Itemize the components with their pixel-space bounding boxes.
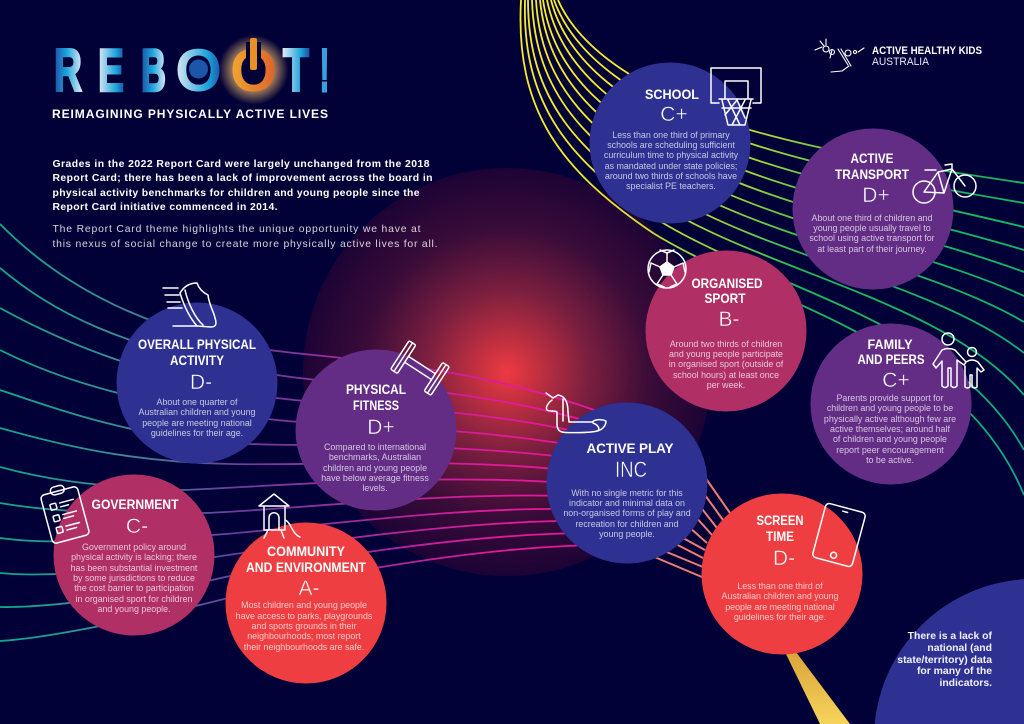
heading: SCREEN <box>756 513 804 528</box>
description: the cost barrier to participation <box>74 583 194 593</box>
grade: INC <box>615 457 647 482</box>
heading: OVERALL PHYSICAL <box>138 337 256 352</box>
grade: B- <box>718 308 740 331</box>
grade: C- <box>126 515 148 538</box>
panel: community and environment <box>226 494 386 684</box>
description: Around two thirds of children <box>670 339 782 349</box>
intro text: theme paragraph: The Report Card theme highlights the unique opportunity we have at <box>52 224 421 235</box>
callout circle <box>875 579 1024 724</box>
salmon fan lines between active play and screen time <box>645 470 730 577</box>
callout text: state/territory) data <box>897 655 992 666</box>
description: per week. <box>707 380 745 390</box>
description: guidelines for their age. <box>734 612 826 622</box>
icon: running shoe <box>163 283 216 327</box>
callout text: for many of the <box>917 666 992 677</box>
description: have access to parks, playgrounds <box>236 611 373 621</box>
logo: Active Healthy Kids Australia <box>815 39 982 72</box>
panel: active transport <box>792 128 976 290</box>
icon: tablet <box>812 503 866 567</box>
panel: school <box>590 62 761 224</box>
description: report peer encouragement <box>836 445 944 455</box>
subtitle: REIMAGINING PHYSICALLY ACTIVE LIVES <box>52 107 328 121</box>
description: in organised sport for children <box>76 594 193 604</box>
heading: AND ENVIRONMENT <box>246 560 367 575</box>
intro text: bold paragraph: Grades in the 2022 Report Card were largely unchanged from the 2018 <box>52 159 430 170</box>
title: REBOOT!: E <box>98 37 124 104</box>
panel: screen time <box>702 494 866 654</box>
description: have below average fitness <box>321 473 429 483</box>
description: About one quarter of <box>157 397 238 407</box>
description: physically active although few are <box>824 414 956 424</box>
description: indicator and minimal data on <box>569 498 685 508</box>
description: Less than one third of primary <box>612 130 730 140</box>
description: school using active transport for <box>809 233 935 243</box>
callout: lack of data <box>875 579 1024 724</box>
description: Australian children and young <box>722 591 839 601</box>
grade: D- <box>190 371 212 394</box>
title: REBOOT!: T <box>283 37 309 104</box>
description: and young people participate <box>669 349 783 359</box>
yellow beam below screen time <box>785 652 850 724</box>
description: physical activity is lacking; there <box>71 552 197 562</box>
intro text: bold paragraph: physical activity benchmarks for children and young people since the <box>52 188 420 199</box>
grade: A- <box>298 577 320 600</box>
icon: basketball hoop <box>711 68 761 125</box>
grade: D+ <box>862 184 890 207</box>
heading: COMMUNITY <box>267 544 345 559</box>
grade: C+ <box>882 369 910 392</box>
icon: adult and child <box>933 333 984 388</box>
description: recreation for children and <box>575 519 679 529</box>
description: has been substantial investment <box>71 563 198 573</box>
callout text: There is a lack of <box>908 631 993 642</box>
icon: clipboard checklist <box>39 481 90 544</box>
heading: ACTIVE <box>850 151 894 166</box>
circle <box>54 474 214 636</box>
description: Australian children and young <box>139 407 256 417</box>
description: levels. <box>362 483 388 493</box>
description: Government policy around <box>82 542 186 552</box>
heading: SPORT <box>704 291 746 306</box>
heading: FAMILY <box>868 337 912 352</box>
intro text: bold paragraph: Report Card; there has been a lack of improvement across the board in <box>52 173 432 184</box>
description: around two thirds of schools have <box>605 171 737 181</box>
description: With no single metric for this <box>571 488 683 498</box>
description: of children and young people <box>833 434 947 444</box>
title: REBOOT!: R <box>54 37 82 104</box>
circle <box>546 402 708 564</box>
heading: ORGANISED <box>692 276 763 291</box>
description: Less than one third of <box>737 581 823 591</box>
title: REBOOT! <box>54 35 329 105</box>
description: young people. <box>599 529 655 539</box>
description: as mandated under state policies; <box>605 161 737 171</box>
description: curriculum time to physical activity <box>604 150 739 160</box>
description: guidelines for their age. <box>151 428 243 438</box>
description: benchmarks, Australian <box>329 452 421 462</box>
description: Most children and young people <box>241 600 367 610</box>
circle <box>296 350 456 510</box>
logo text: ACTIVE HEALTHY KIDS <box>872 45 982 57</box>
icon: bicycle <box>913 164 976 203</box>
glowing red sphere <box>303 168 711 576</box>
panel: active play <box>546 393 708 564</box>
description: people are meeting national <box>725 602 835 612</box>
grade: D+ <box>367 416 395 439</box>
description: in organised sport (outside of <box>669 359 784 369</box>
icon: kangaroo <box>815 39 864 72</box>
circle <box>810 324 972 484</box>
description: school hours) at least once <box>673 370 779 380</box>
teal to magenta track lines <box>0 224 600 641</box>
description: young people usually travel to <box>813 223 931 233</box>
description: neighbourhoods; most report <box>247 631 361 641</box>
description: schools are scheduling sufficient <box>607 140 735 150</box>
circle <box>646 250 806 412</box>
circle <box>226 522 386 684</box>
circle <box>702 494 862 654</box>
description: Compared to international <box>324 442 426 452</box>
intro text: theme paragraph: this nexus of social change to create more physically active lives for all. <box>52 239 438 250</box>
description: people are meeting national <box>142 418 252 428</box>
description: children and young people to be <box>827 403 953 413</box>
panel: family and peers <box>810 324 984 484</box>
description: children and young people <box>323 463 427 473</box>
description: and young people. <box>97 604 171 614</box>
description: active themselves; around half <box>830 424 950 434</box>
intro text: bold paragraph: Report Card initiative commenced in 2014. <box>52 202 278 213</box>
description: specialist PE teachers. <box>626 181 716 191</box>
circle <box>792 128 954 290</box>
description: About one third of children and <box>812 213 933 223</box>
icon: dumbbell <box>391 341 449 395</box>
description: to be active. <box>866 455 914 465</box>
heading: TIME <box>766 529 794 544</box>
grade: C+ <box>660 103 688 126</box>
grade: D- <box>773 547 795 570</box>
heading: FITNESS <box>353 398 399 413</box>
icon: soccer ball <box>648 250 686 288</box>
title: REBOOT!: B <box>141 37 166 104</box>
callout text: national (and <box>927 643 992 654</box>
panel: organised sport <box>646 250 806 412</box>
logo: Active Healthy Kids Australia: AUSTRALIA <box>872 56 930 68</box>
panel: physical fitness <box>296 341 456 510</box>
description: at least part of their journey. <box>817 244 927 254</box>
circle <box>116 302 278 464</box>
callout text: indicators. <box>939 678 992 689</box>
circle <box>590 62 750 224</box>
title: REBOOT!: O <box>230 37 277 104</box>
text: ! <box>320 37 329 104</box>
heading: ACTIVITY <box>170 353 224 368</box>
description: and sports grounds in their <box>251 621 357 631</box>
heading: GOVERNMENT <box>92 497 179 512</box>
heading: SCHOOL <box>645 87 699 102</box>
heading: TRANSPORT <box>835 167 910 182</box>
heading: AND PEERS <box>858 352 924 367</box>
heading: ACTIVE PLAY <box>586 441 674 456</box>
description: non-organised forms of play and <box>563 508 691 518</box>
description: Parents provide support for <box>836 393 944 403</box>
yellow to green track lines <box>520 0 1024 495</box>
icon: cubby house with slide <box>259 494 300 538</box>
heading: PHYSICAL <box>346 382 406 397</box>
panel: overall physical activity <box>116 283 278 464</box>
panel: government <box>39 474 214 636</box>
title: REBOOT!: O <box>175 37 222 104</box>
description: by some jurisdictions to reduce <box>73 573 195 583</box>
icon: unicorn pool float <box>546 393 606 433</box>
description: their neighbourhoods are safe. <box>244 642 364 652</box>
